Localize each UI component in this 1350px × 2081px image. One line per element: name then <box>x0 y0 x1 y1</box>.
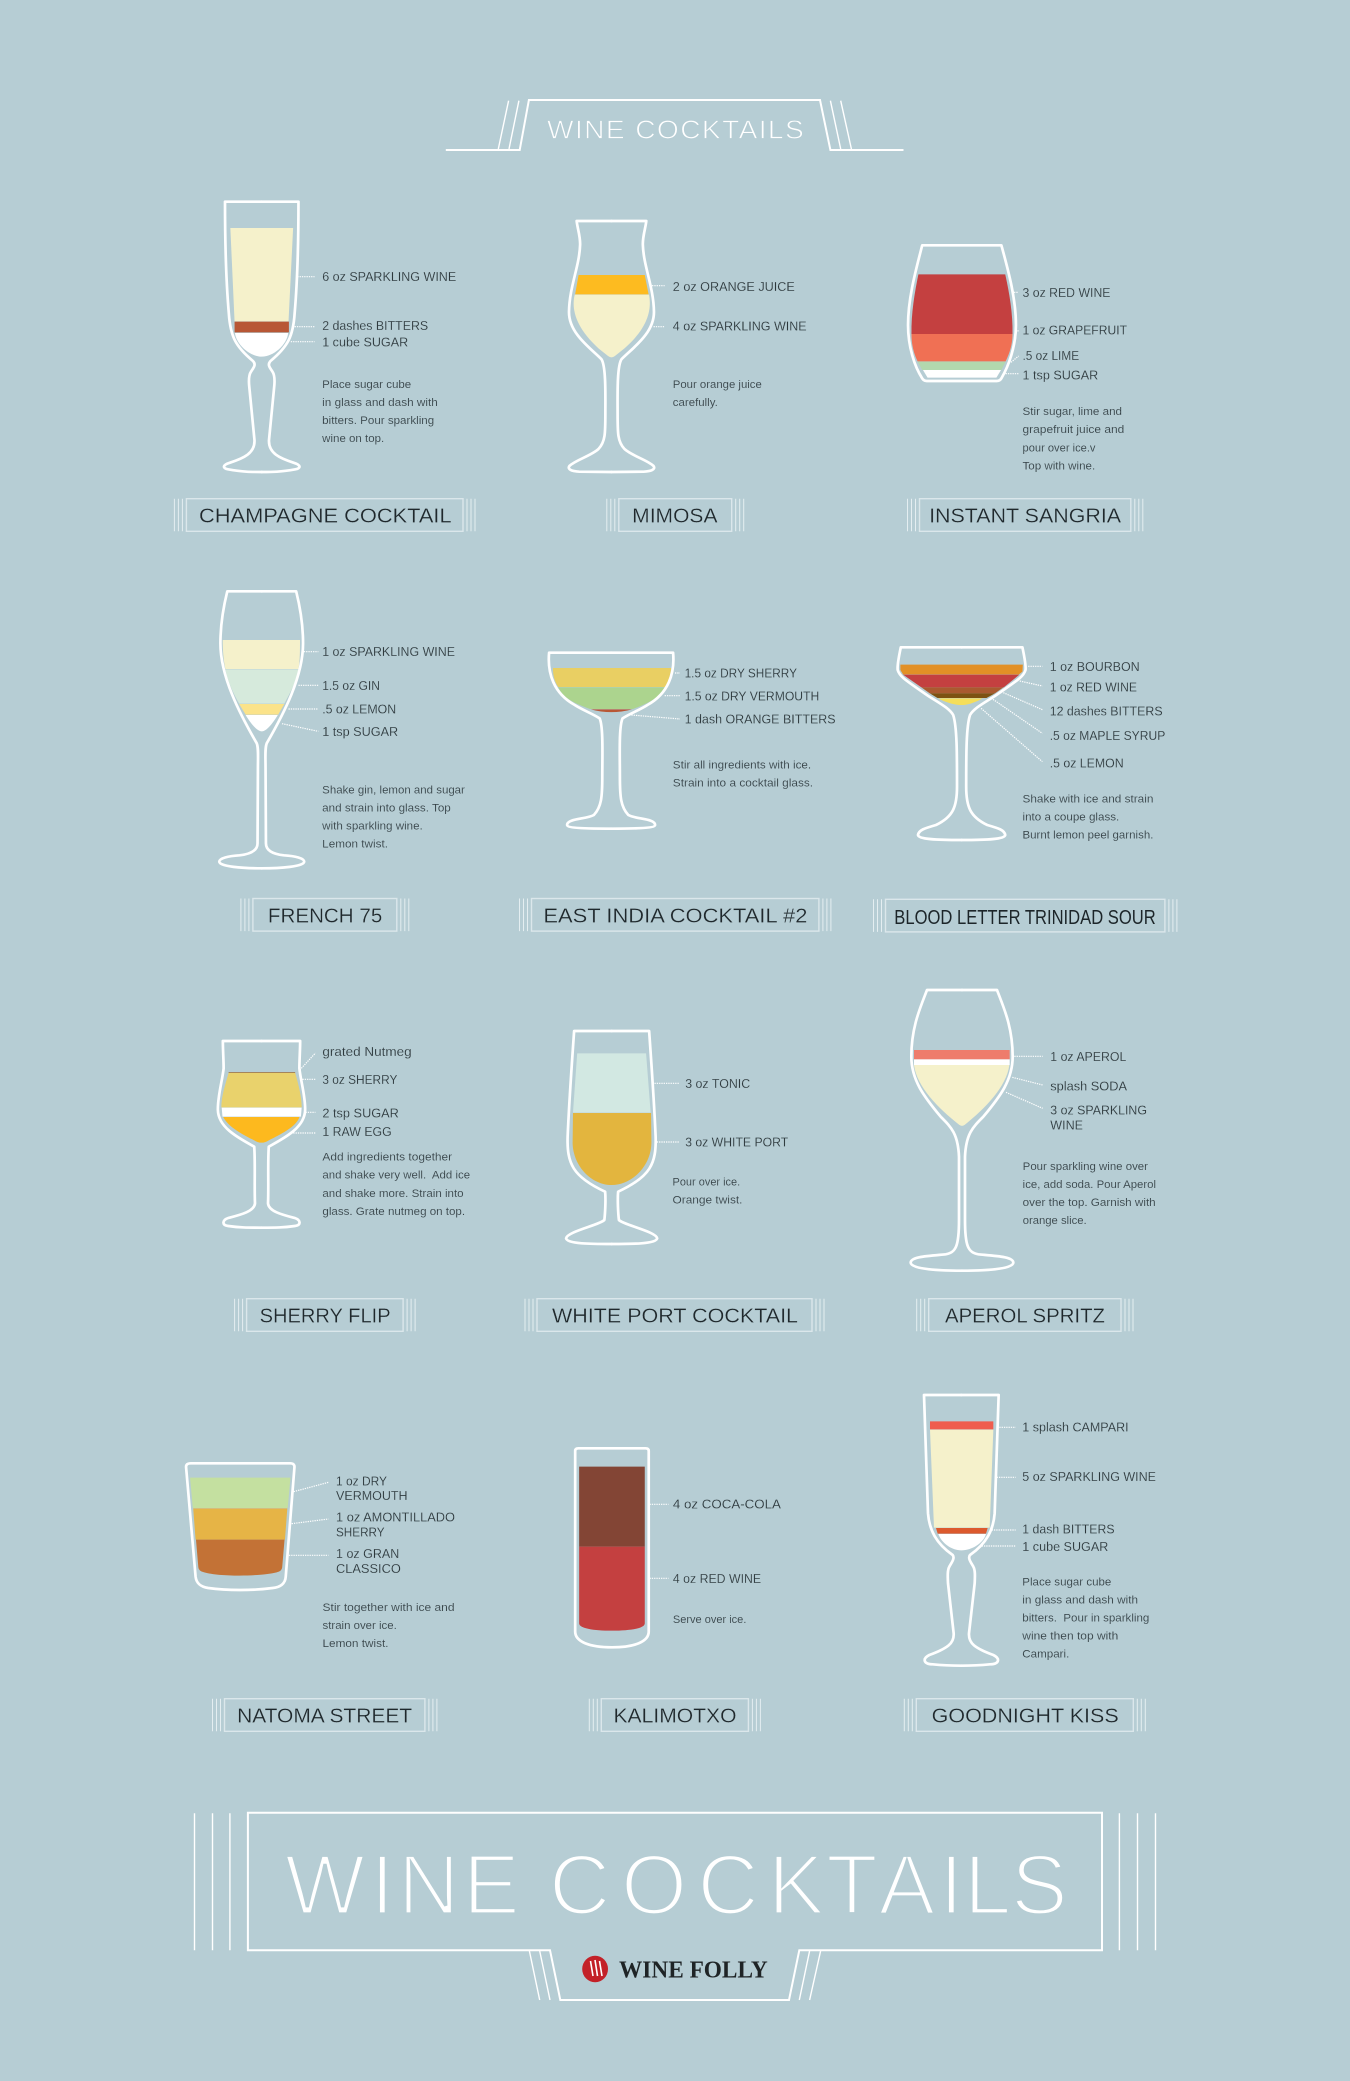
ingredient labels: 4 oz RED WINE <box>673 1571 761 1586</box>
instructions: Orange twist. <box>672 1195 742 1207</box>
glass: flute <box>924 1395 1016 1666</box>
ingredient labels: 1 tsp SUGAR <box>322 724 398 739</box>
name plate: SHERRY FLIP <box>260 1306 391 1328</box>
name plate: CHAMPAGNE COCKTAIL <box>199 506 452 528</box>
name plate <box>525 1299 824 1331</box>
brand name: wine folly: WINE FOLLY <box>619 1958 768 1984</box>
name plate: INSTANT SANGRIA <box>929 506 1122 528</box>
instructions: Strain into a cocktail glass. <box>673 777 813 789</box>
panel: blood letter trinidad sour <box>874 647 1177 932</box>
ingredient labels: 3 oz RED WINE <box>1022 285 1111 300</box>
ingredient labels: 1.5 oz DRY VERMOUTH <box>685 688 819 703</box>
glass: tall flute <box>219 591 318 868</box>
instructions: Add ingredients together <box>322 1152 452 1164</box>
ingredient labels <box>336 1473 455 1576</box>
instructions: Lemon twist. <box>322 838 388 850</box>
instructions: Top with wine. <box>1022 460 1095 472</box>
ingredient labels: 1 oz DRY <box>336 1473 387 1488</box>
instructions: grapefruit juice and <box>1022 424 1124 436</box>
glass: highball <box>575 1448 668 1647</box>
ingredient labels <box>673 279 807 333</box>
footer heading: wine cocktails: WINE COCKTAILS <box>285 1838 1068 1933</box>
ingredient labels: 1 RAW EGG <box>322 1124 392 1139</box>
ingredient labels: 3 oz SPARKLING <box>1050 1102 1147 1117</box>
ingredient labels: 1 oz RED WINE <box>1050 679 1137 694</box>
ingredient labels: 1 cube SUGAR <box>1022 1539 1108 1554</box>
ingredient labels <box>685 665 836 726</box>
instructions: Place sugar cube <box>1022 1576 1111 1588</box>
panel: sherry flip <box>218 1041 470 1331</box>
ingredient labels <box>1022 1420 1156 1554</box>
instructions: in glass and dash with <box>322 397 438 409</box>
ingredient labels <box>685 1076 788 1150</box>
panel: champagne cocktail <box>174 202 475 531</box>
instructions: ice, add soda. Pour Aperol <box>1023 1179 1156 1191</box>
instructions: pour over ice.v <box>1022 442 1096 454</box>
instructions: wine then top with <box>1021 1630 1118 1642</box>
instructions: and shake more. Strain into <box>322 1188 464 1200</box>
instructions <box>673 379 762 409</box>
ingredient labels: 3 oz WHITE PORT <box>685 1135 788 1150</box>
instructions <box>1022 406 1124 472</box>
instructions: glass. Grate nutmeg on top. <box>322 1206 465 1218</box>
instructions: Lemon twist. <box>322 1638 388 1650</box>
glass: tulip <box>569 221 665 472</box>
instructions <box>1022 794 1153 842</box>
name plate <box>174 499 475 531</box>
instructions: and shake very well. Add ice <box>322 1170 470 1182</box>
ingredient labels: 2 dashes BITTERS <box>322 318 429 333</box>
name plate <box>235 1299 415 1331</box>
panel: goodnight kiss <box>904 1395 1156 1731</box>
ingredient labels: 1 oz AMONTILLADO <box>336 1510 455 1525</box>
name plate <box>904 1699 1145 1731</box>
glass: coupe <box>549 653 680 829</box>
ingredient labels <box>1050 1049 1147 1132</box>
instructions: Pour sparkling wine over <box>1023 1161 1148 1173</box>
ingredient labels: 1.5 oz GIN <box>322 678 380 693</box>
instructions <box>322 1602 454 1650</box>
ingredient labels: 2 tsp SUGAR <box>322 1105 399 1120</box>
instructions: carefully. <box>673 397 718 409</box>
name plate <box>520 898 831 931</box>
instructions: Burnt lemon peel garnish. <box>1022 830 1153 842</box>
instructions: orange slice. <box>1023 1215 1087 1227</box>
ingredient labels: WINE <box>1050 1117 1083 1132</box>
instructions: over the top. Garnish with <box>1023 1197 1156 1209</box>
name plate <box>241 898 409 931</box>
name plate <box>589 1699 760 1731</box>
name plate: MIMOSA <box>632 506 718 528</box>
glass: footed pilsner <box>566 1031 680 1244</box>
panel: east india cocktail <box>520 653 836 931</box>
ingredient labels: 4 oz SPARKLING WINE <box>673 318 807 333</box>
ingredient labels <box>322 269 457 349</box>
ingredient labels: SHERRY <box>336 1525 385 1540</box>
panel: natoma street <box>186 1463 455 1731</box>
ingredient labels: 12 dashes BITTERS <box>1050 704 1163 719</box>
instructions: into a coupe glass. <box>1022 812 1119 824</box>
ingredient labels: VERMOUTH <box>336 1488 408 1503</box>
panel: aperol spritz <box>911 990 1156 1331</box>
ingredient labels: .5 oz MAPLE SYRUP <box>1050 728 1165 743</box>
panel: instant sangria <box>908 245 1143 531</box>
ingredient labels <box>322 1044 412 1139</box>
panel: kalimotxo <box>575 1448 781 1731</box>
ingredient labels: 1 dash ORANGE BITTERS <box>685 711 836 726</box>
heading: wine cocktails: WINE COCKTAILS <box>547 115 804 144</box>
name plate: KALIMOTXO <box>614 1706 736 1728</box>
ingredient labels: 1 dash BITTERS <box>1022 1522 1115 1537</box>
ingredient labels <box>322 644 455 739</box>
instructions: Shake with ice and strain <box>1022 794 1153 806</box>
ingredient labels: 1 cube SUGAR <box>322 334 408 349</box>
instructions: Campari. <box>1022 1648 1069 1660</box>
instructions: Stir together with ice and <box>322 1602 454 1614</box>
instructions: Place sugar cube <box>322 379 411 391</box>
ingredient labels <box>1022 285 1127 382</box>
instructions <box>672 1177 742 1207</box>
instructions <box>321 784 465 850</box>
header: top title banner <box>446 100 904 150</box>
name plate: NATOMA STREET <box>237 1706 412 1728</box>
instructions: Stir all ingredients with ice. <box>673 759 811 771</box>
instructions <box>1023 1161 1156 1227</box>
ingredient labels: .5 oz LEMON <box>322 701 396 716</box>
instructions: with sparkling wine. <box>321 820 423 832</box>
instructions <box>1021 1576 1149 1660</box>
ingredient labels: 1.5 oz DRY SHERRY <box>685 665 797 680</box>
name plate: WHITE PORT COCKTAIL <box>552 1306 798 1328</box>
name plate: FRENCH 75 <box>268 906 382 928</box>
glass: champagne flute <box>224 202 315 472</box>
instructions: strain over ice. <box>322 1620 397 1632</box>
instructions <box>673 759 813 789</box>
ingredient labels: 6 oz SPARKLING WINE <box>322 269 457 284</box>
instructions: bitters. Pour sparkling <box>322 415 434 427</box>
instructions: Stir sugar, lime and <box>1022 406 1122 418</box>
ingredient labels: splash SODA <box>1050 1079 1127 1094</box>
glass: wine glass <box>911 990 1043 1271</box>
ingredient labels <box>1050 659 1165 770</box>
name plate: EAST INDIA COCKTAIL #2 <box>543 906 807 928</box>
footer: banner <box>194 1813 1156 2000</box>
name plate <box>908 499 1143 531</box>
instructions <box>321 379 438 445</box>
name plate <box>874 899 1177 932</box>
glass: stemless <box>908 245 1019 381</box>
instructions: Pour orange juice <box>673 379 762 391</box>
name plate <box>917 1299 1133 1331</box>
instructions: Pour over ice. <box>672 1177 740 1189</box>
ingredient labels: 2 oz ORANGE JUICE <box>673 279 795 294</box>
name plate <box>607 499 744 531</box>
glass: rocks tumbler <box>186 1463 328 1590</box>
glass: small tulip <box>218 1041 315 1228</box>
name plate <box>212 1699 437 1731</box>
ingredient labels: grated Nutmeg <box>322 1044 412 1059</box>
instructions: in glass and dash with <box>1022 1594 1138 1606</box>
panel: french 75 <box>219 591 465 931</box>
instructions: Serve over ice. <box>673 1614 746 1626</box>
glass: angular coupe <box>898 647 1042 840</box>
name plate: APEROL SPRITZ <box>945 1306 1105 1328</box>
ingredient labels: 1 oz BOURBON <box>1050 659 1140 674</box>
ingredient labels: 4 oz COCA-COLA <box>673 1497 781 1512</box>
name plate: GOODNIGHT KISS <box>932 1706 1119 1728</box>
ingredient labels: .5 oz LEMON <box>1050 755 1124 770</box>
ingredient labels: 1 splash CAMPARI <box>1022 1420 1129 1435</box>
instructions <box>322 1152 470 1218</box>
ingredient labels <box>673 1497 781 1586</box>
ingredient labels: 1 oz APEROL <box>1050 1049 1126 1064</box>
instructions: wine on top. <box>321 433 384 445</box>
ingredient labels: 3 oz SHERRY <box>322 1072 398 1087</box>
ingredient labels: 1 oz GRAN <box>336 1546 399 1561</box>
instructions: Shake gin, lemon and sugar <box>322 784 465 796</box>
instructions: bitters. Pour in sparkling <box>1022 1612 1149 1624</box>
name plate: BLOOD LETTER TRINIDAD SOUR <box>894 907 1156 929</box>
ingredient labels: 1 tsp SUGAR <box>1022 367 1098 382</box>
ingredient labels: 3 oz TONIC <box>685 1076 750 1091</box>
instructions: and strain into glass. Top <box>322 802 451 814</box>
ingredient labels: CLASSICO <box>336 1561 401 1576</box>
panel: mimosa <box>569 221 807 531</box>
ingredient labels: 5 oz SPARKLING WINE <box>1022 1469 1156 1484</box>
panel: white port cocktail <box>525 1031 824 1331</box>
icon: wine folly logo mark <box>582 1956 608 1982</box>
ingredient labels: 1 oz GRAPEFRUIT <box>1022 322 1127 337</box>
ingredient labels: 1 oz SPARKLING WINE <box>322 644 455 659</box>
ingredient labels: .5 oz LIME <box>1022 348 1079 363</box>
